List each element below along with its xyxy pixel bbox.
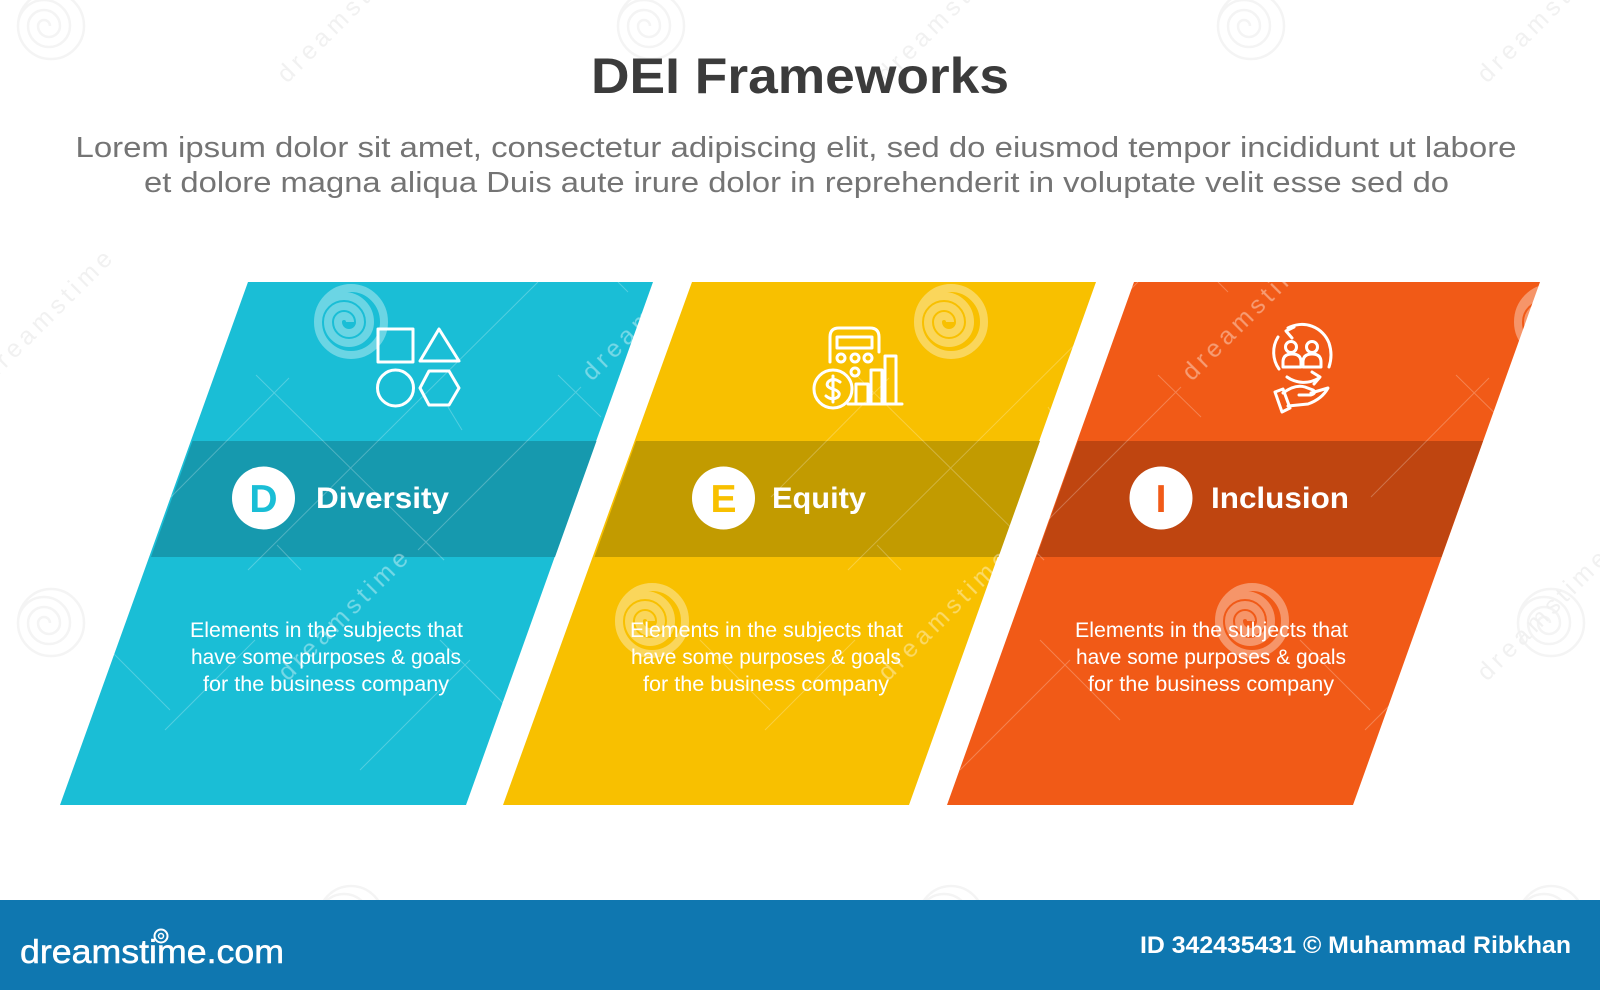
description: Diversity: have some purposes & goals: [191, 646, 461, 669]
band: Inclusion heading: [1036, 441, 1483, 557]
icon: people in cycle above hand: [1274, 324, 1331, 412]
panel: Diversity: [60, 282, 653, 805]
watermark text over panels: dreamstime: [272, 545, 414, 686]
description: Inclusion: have some purposes & goals: [1076, 646, 1346, 669]
icon: geometric shapes: [378, 329, 459, 406]
badge: letter E: [692, 466, 755, 530]
description: Diversity: [190, 619, 463, 696]
label: Diversity: Diversity: [316, 482, 449, 515]
subtitle text: et dolore magna aliqua Duis aute irure dolor in reprehenderit in voluptate velit esse sed do: [144, 167, 1449, 199]
footer logo: dreamstime.com: [20, 933, 284, 970]
badge: letter D: [232, 466, 295, 530]
watermark text over panels: [272, 245, 1318, 686]
description: Diversity: Elements in the subjects that: [190, 619, 463, 642]
badge: letter E: E: [710, 478, 737, 521]
label: Equity: Equity: [772, 482, 866, 515]
watermark lines over panels: [0, 282, 1600, 770]
panel shape: blue parallelogram: [60, 282, 653, 805]
description: Inclusion: [1075, 619, 1348, 696]
panel shape: yellow parallelogram: [503, 282, 1096, 805]
watermark text over panels: dreamstime: [576, 245, 718, 386]
footer credit: ID 342435431 © Muhammad Ribkhan: [1140, 932, 1571, 959]
description: Equity: [630, 619, 903, 696]
panel shape: orange parallelogram: [947, 282, 1540, 805]
watermark text over panels: dreamstime: [1176, 245, 1318, 386]
description: Diversity: for the business company: [203, 673, 450, 696]
badge: letter D: D: [249, 478, 278, 521]
description: Inclusion: Elements in the subjects that: [1075, 619, 1348, 642]
watermark text over panels: dreamstime: [872, 545, 1014, 686]
description: Equity: for the business company: [643, 673, 890, 696]
subtitle text: Lorem ipsum dolor sit amet, consectetur adipiscing elit, sed do eiusmod tempor incididunt ut labore: [76, 132, 1516, 164]
panel: Inclusion: [947, 282, 1540, 805]
badge: letter I: [1130, 466, 1192, 530]
panel: Equity: [503, 282, 1096, 805]
band: Equity heading: [594, 441, 1040, 557]
background watermark text: [0, 0, 1600, 686]
band: Diversity heading: [151, 441, 596, 557]
title: DEI Frameworks: [591, 48, 1009, 104]
badge: letter I: I: [1156, 478, 1166, 521]
description: Inclusion: for the business company: [1088, 673, 1335, 696]
watermark spirals over panels: [318, 288, 1584, 654]
footer bar: [0, 900, 1600, 990]
label: Inclusion: Inclusion: [1211, 482, 1349, 515]
icon: calculator, coin and bar chart: [814, 328, 902, 408]
description: Equity: Elements in the subjects that: [630, 619, 903, 642]
description: Equity: have some purposes & goals: [631, 646, 901, 669]
subtitle text: [76, 132, 1516, 199]
